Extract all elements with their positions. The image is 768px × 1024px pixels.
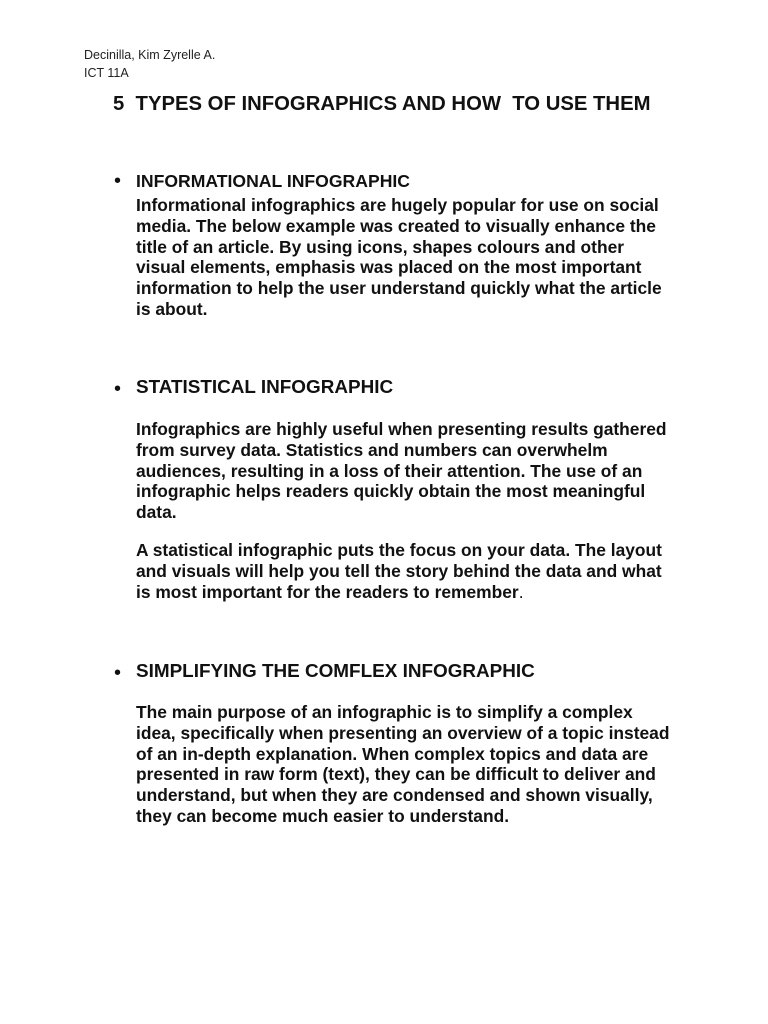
- bullet: •: [114, 170, 121, 192]
- paragraph: statistical 2: and visuals will help you tell the story behind the data and what: [136, 561, 662, 581]
- section: statistical infographic: [114, 377, 667, 602]
- paragraph: statistical 2: [136, 540, 662, 602]
- title: 5 TYPES OF INFOGRAPHICS AND HOW TO USE THEM: [113, 93, 650, 115]
- bullet: •: [114, 378, 121, 400]
- paragraph: informational: visual elements, emphasis was placed on the most important: [136, 257, 641, 277]
- heading: statistical: STATISTICAL INFOGRAPHIC: [136, 377, 393, 398]
- paragraph: simplifying: [136, 702, 669, 826]
- paragraph: simplifying: understand, but when they are condensed and shown visually,: [136, 785, 653, 805]
- paragraph: statistical 1: [136, 419, 667, 522]
- paragraph: simplifying: they can become much easier to understand.: [136, 806, 509, 826]
- paragraph: informational: is about.: [136, 299, 208, 319]
- heading: informational: INFORMATIONAL INFOGRAPHIC: [136, 171, 410, 191]
- paragraph: statistical 2: is most important for the readers to remember.: [136, 582, 524, 602]
- paragraph: statistical 1: from survey data. Statistics and numbers can overwhelm: [136, 440, 608, 460]
- paragraph: statistical 1: data.: [136, 502, 177, 522]
- paragraph: informational: media. The below example was created to visually enhance the: [136, 216, 656, 236]
- header: author name and class: ICT 11A: [84, 66, 129, 80]
- bullet: •: [114, 662, 121, 684]
- paragraph: statistical 1: infographic helps readers quickly obtain the most meaningful: [136, 481, 645, 501]
- paragraph: statistical 1: audiences, resulting in a loss of their attention. The use of an: [136, 461, 642, 481]
- section: simplifying the complex infographic: [114, 661, 669, 826]
- paragraph: simplifying: of an in-depth explanation. When complex topics and data are: [136, 744, 648, 764]
- paragraph: statistical 2: A statistical infographic puts the focus on your data. The layout: [136, 540, 662, 560]
- header: author name and class: Decinilla, Kim Zyrelle A.: [84, 48, 215, 62]
- paragraph: informational: Informational infographics are hugely popular for use on social: [136, 195, 659, 215]
- heading: simplifying: SIMPLIFYING THE COMFLEX INFOGRAPHIC: [136, 661, 535, 682]
- paragraph: simplifying: presented in raw form (text), they can be difficult to deliver and: [136, 764, 656, 784]
- paragraph: informational: [136, 195, 662, 319]
- paragraph: simplifying: idea, specifically when presenting an overview of a topic instead: [136, 723, 669, 743]
- section: informational infographic: [114, 170, 662, 319]
- header: author name and class: [84, 48, 215, 80]
- paragraph: simplifying: The main purpose of an infographic is to simplify a complex: [136, 702, 633, 722]
- paragraph: statistical 1: Infographics are highly useful when presenting results gathered: [136, 419, 667, 439]
- paragraph: informational: title of an article. By using icons, shapes colours and other: [136, 237, 624, 257]
- paragraph: informational: information to help the user understand quickly what the article: [136, 278, 662, 298]
